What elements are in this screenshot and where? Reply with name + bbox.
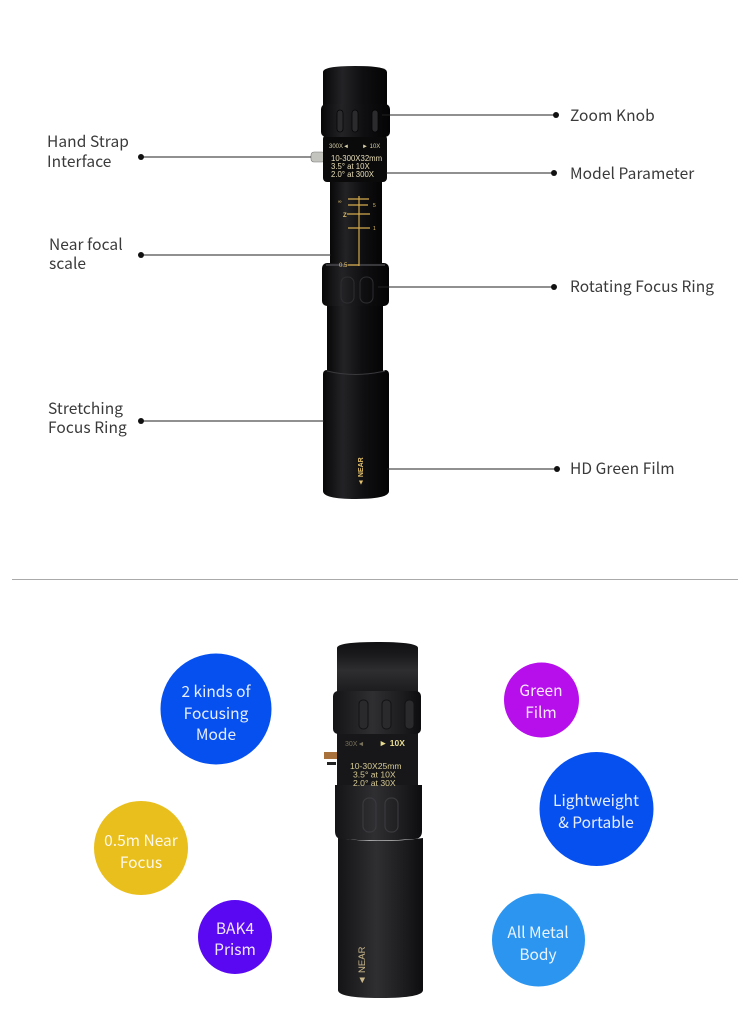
- callout: Rotating Focus Ring: [378, 275, 714, 297]
- model parameter text: [345, 738, 405, 985]
- model parameter text: ◄ NEAR: [357, 946, 368, 985]
- callout: Hand Strap Interface: [47, 130, 311, 172]
- monocular: upper product photo: [311, 66, 390, 499]
- badge: BAK4 Prism: [198, 900, 272, 974]
- model parameter text: 10-30X25mm: [350, 761, 402, 771]
- monocular: upper product photo: 0.5: [339, 263, 348, 269]
- callout: HD Green Film: [387, 457, 675, 479]
- monocular: upper product photo: Z: [343, 213, 347, 219]
- model parameter text: 2.0° at 300X: [331, 170, 375, 179]
- badge: 2 kinds of Focusing Mode: Focusing: [184, 702, 249, 724]
- badge: 2 kinds of Focusing Mode: 2 kinds of: [181, 680, 252, 702]
- monocular: upper product photo: 1: [373, 226, 376, 232]
- callout: Zoom Knob: Zoom Knob: [570, 104, 655, 126]
- badge: 0.5m Near Focus: [94, 801, 188, 895]
- callout: Stretching Focus Ring: Focus Ring: [48, 416, 127, 438]
- badge: 0.5m Near Focus: Focus: [120, 851, 162, 873]
- callout: Near focal scale: Near focal: [49, 233, 123, 255]
- model parameter text: 2.0° at 30X: [353, 778, 396, 788]
- badge: Lightweight & Portable: Lightweight: [553, 789, 639, 811]
- callout: Hand Strap Interface: Hand Strap: [47, 130, 129, 152]
- model parameter text: 3.5° at 10X: [353, 770, 396, 780]
- callout: Stretching Focus Ring: Stretching: [48, 397, 123, 419]
- model parameter text: 3.5° at 10X: [331, 162, 370, 171]
- badge: 0.5m Near Focus: 0.5m Near: [104, 829, 179, 851]
- callout: Rotating Focus Ring: Rotating Focus Ring: [570, 275, 714, 297]
- model parameter text: [329, 144, 382, 179]
- callout: Near focal scale: scale: [49, 252, 86, 274]
- badge: Green Film: Film: [525, 701, 557, 723]
- callout: Near focal scale: [49, 233, 331, 274]
- monocular: upper product photo: ◄ NEAR: [358, 457, 365, 486]
- model parameter text: 10-300X32mm: [331, 154, 382, 163]
- badge: Lightweight & Portable: & Portable: [558, 811, 634, 833]
- badge: BAK4 Prism: BAK4: [216, 917, 255, 939]
- model parameter text: ► 10X: [362, 144, 380, 150]
- callout: Model Parameter: [386, 162, 695, 184]
- monocular: upper product photo: ∞: [338, 199, 342, 205]
- scale markings: [347, 196, 370, 266]
- badge: BAK4 Prism: Prism: [214, 938, 256, 960]
- monocular: upper product photo: 5: [373, 203, 376, 209]
- badge: Lightweight & Portable: [540, 752, 654, 866]
- model parameter text: 30X◄: [345, 741, 364, 748]
- strap lug: [324, 752, 337, 759]
- callout: Zoom Knob: [382, 104, 655, 126]
- callout: Hand Strap Interface: Interface: [47, 150, 111, 172]
- badge: Green Film: Green: [519, 679, 563, 701]
- monocular: lower product photo: [324, 642, 423, 998]
- callout: HD Green Film: HD Green Film: [570, 457, 675, 479]
- badge: Green Film: [504, 662, 579, 738]
- callout: Model Parameter: Model Parameter: [570, 162, 695, 184]
- model parameter text: ► 10X: [379, 738, 405, 748]
- badge: All Metal Body: [492, 894, 585, 986]
- badge: All Metal Body: All Metal: [507, 921, 569, 943]
- model parameter text: 300X◄: [329, 144, 349, 150]
- callout: Stretching Focus Ring: [48, 397, 324, 438]
- badge: 2 kinds of Focusing Mode: [160, 654, 272, 764]
- badge: 2 kinds of Focusing Mode: Mode: [196, 723, 236, 745]
- strap lug: [311, 152, 325, 162]
- badge: All Metal Body: Body: [519, 943, 557, 965]
